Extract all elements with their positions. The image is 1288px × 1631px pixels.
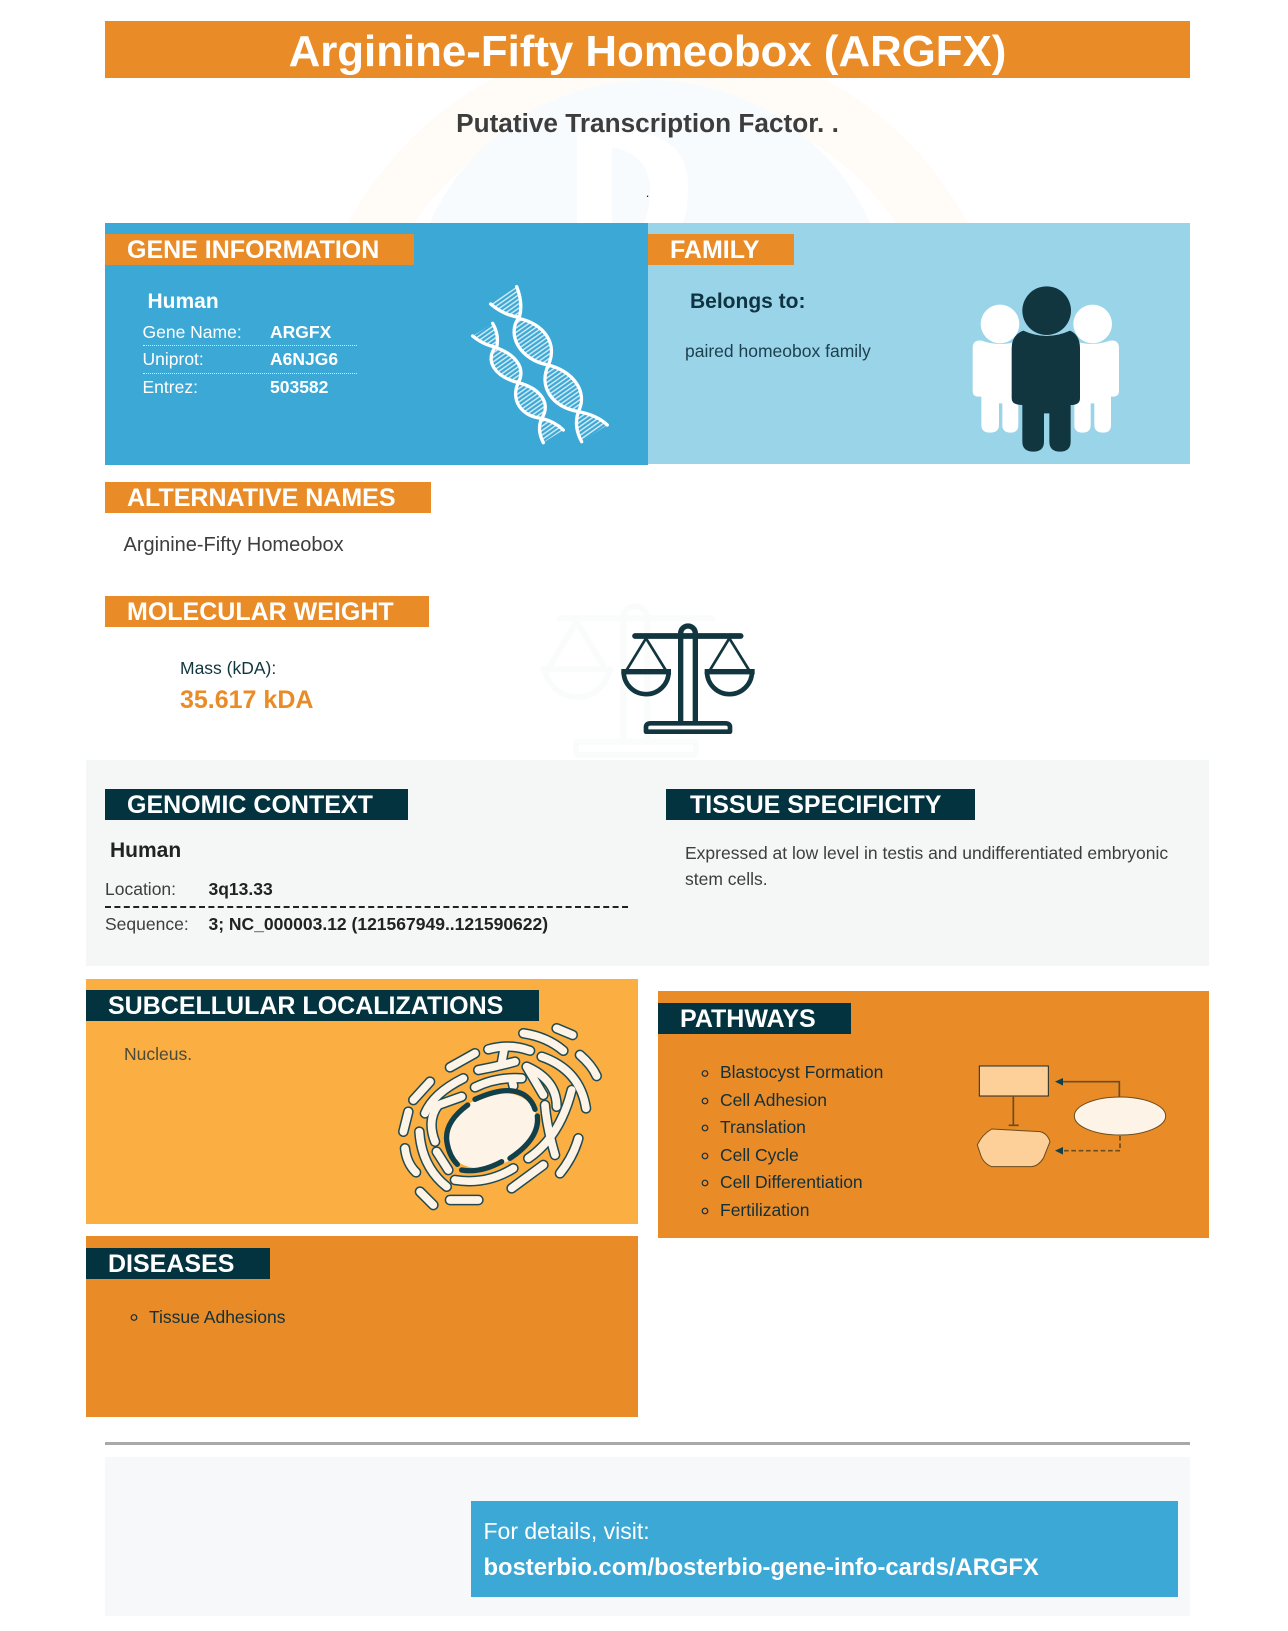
heading: genomic context: GENOMIC CONTEXT: [127, 791, 373, 819]
panel: gene information: [105, 223, 648, 465]
pathway list: [702, 1062, 883, 1220]
heading: tissue specificity: TISSUE SPECIFICITY: [690, 791, 941, 819]
centered dot: .: [646, 185, 649, 200]
genomic organism label: Human: [110, 839, 181, 862]
entrez row: 503582: [270, 376, 328, 396]
gene name row: [142, 319, 356, 346]
family name: paired homeobox family: [685, 341, 871, 361]
panel: genomic context and tissue specificity: [86, 760, 1209, 966]
callout: details link: [471, 1501, 1178, 1597]
heading: alternative names: ALTERNATIVE NAMES: [127, 484, 396, 512]
location row: [105, 879, 273, 899]
list item: cell adhesion: Cell Adhesion: [720, 1090, 827, 1110]
uniprot row: A6NJG6: [270, 349, 338, 369]
panel: genomic context and tissue specificity: 3q13.33: [208, 879, 273, 899]
heading: molecular weight: MOLECULAR WEIGHT: [127, 598, 394, 626]
heading: pathways: PATHWAYS: [680, 1005, 816, 1033]
panel: pathways: [658, 991, 1209, 1238]
tissue specificity text: Expressed at low level in testis and undifferentiated embryonic stem cells.: [685, 843, 1168, 889]
gene name row: ARGFX: [270, 322, 331, 342]
list item: translation: Translation: [720, 1117, 806, 1137]
list item: blastocyst formation: Blastocyst Formation: [720, 1062, 883, 1082]
panel: genomic context and tissue specificity: 3; NC_000003.12 (121567949..121590622): [208, 914, 548, 934]
disease list item: Tissue Adhesions: [149, 1307, 286, 1327]
list item: cell cycle: Cell Cycle: [720, 1145, 799, 1165]
icon: balance scale: [621, 623, 755, 734]
background watermark logo: [0, 0, 1288, 230]
dashed divider: [105, 906, 628, 908]
heading: subcellular localizations: SUBCELLULAR LOCALIZATIONS: [108, 992, 503, 1020]
heading: family: [648, 234, 794, 265]
icon: organelle: [398, 1023, 602, 1210]
mass value: 35.617 kDA: [180, 686, 313, 714]
heading: family: FAMILY: [670, 236, 759, 264]
entrez row: [142, 376, 328, 396]
icon: dna helix: [470, 285, 610, 444]
mass label: Mass (kDA):: [180, 658, 276, 678]
uniprot row: [142, 346, 356, 374]
title banner: Arginine-Fifty Homeobox (ARGFX): [289, 27, 1006, 76]
gene organism label: Human: [148, 290, 219, 313]
alternative names text: Arginine-Fifty Homeobox: [124, 534, 344, 556]
title banner: [105, 21, 1190, 78]
subtitle: Putative Transcription Factor. .: [456, 108, 839, 138]
callout url: bosterbio.com/bosterbio-gene-info-cards/ARGFX: [484, 1554, 1039, 1581]
heading: diseases: DISEASES: [108, 1250, 234, 1278]
panel: footer: [105, 1457, 1190, 1616]
icon: pathway diagram: [976, 1066, 1166, 1168]
panel: subcellular localizations: [86, 979, 638, 1224]
disease bullet: [130, 1314, 138, 1321]
localization text: Nucleus.: [124, 1044, 192, 1064]
list item: fertilization: Fertilization: [720, 1200, 809, 1220]
heading: gene information: GENE INFORMATION: [127, 236, 379, 264]
belongs to label: Belongs to:: [690, 290, 806, 313]
heading: pathways: [658, 1003, 851, 1034]
location row: Location:: [105, 879, 176, 899]
list bullets: [702, 1070, 708, 1214]
panel: diseases: [86, 1236, 638, 1417]
list item: cell differentiation: Cell Differentiation: [720, 1172, 863, 1192]
uniprot row: Uniprot:: [142, 349, 204, 369]
icon: group of people: [972, 286, 1119, 452]
panel: family: [648, 223, 1190, 464]
callout label: For details, visit:: [484, 1518, 650, 1544]
sequence row: Sequence:: [105, 914, 189, 934]
sequence row: [105, 914, 548, 934]
heading: diseases: [86, 1248, 270, 1279]
entrez row: Entrez:: [142, 376, 198, 396]
gene name row: Gene Name:: [142, 322, 242, 342]
